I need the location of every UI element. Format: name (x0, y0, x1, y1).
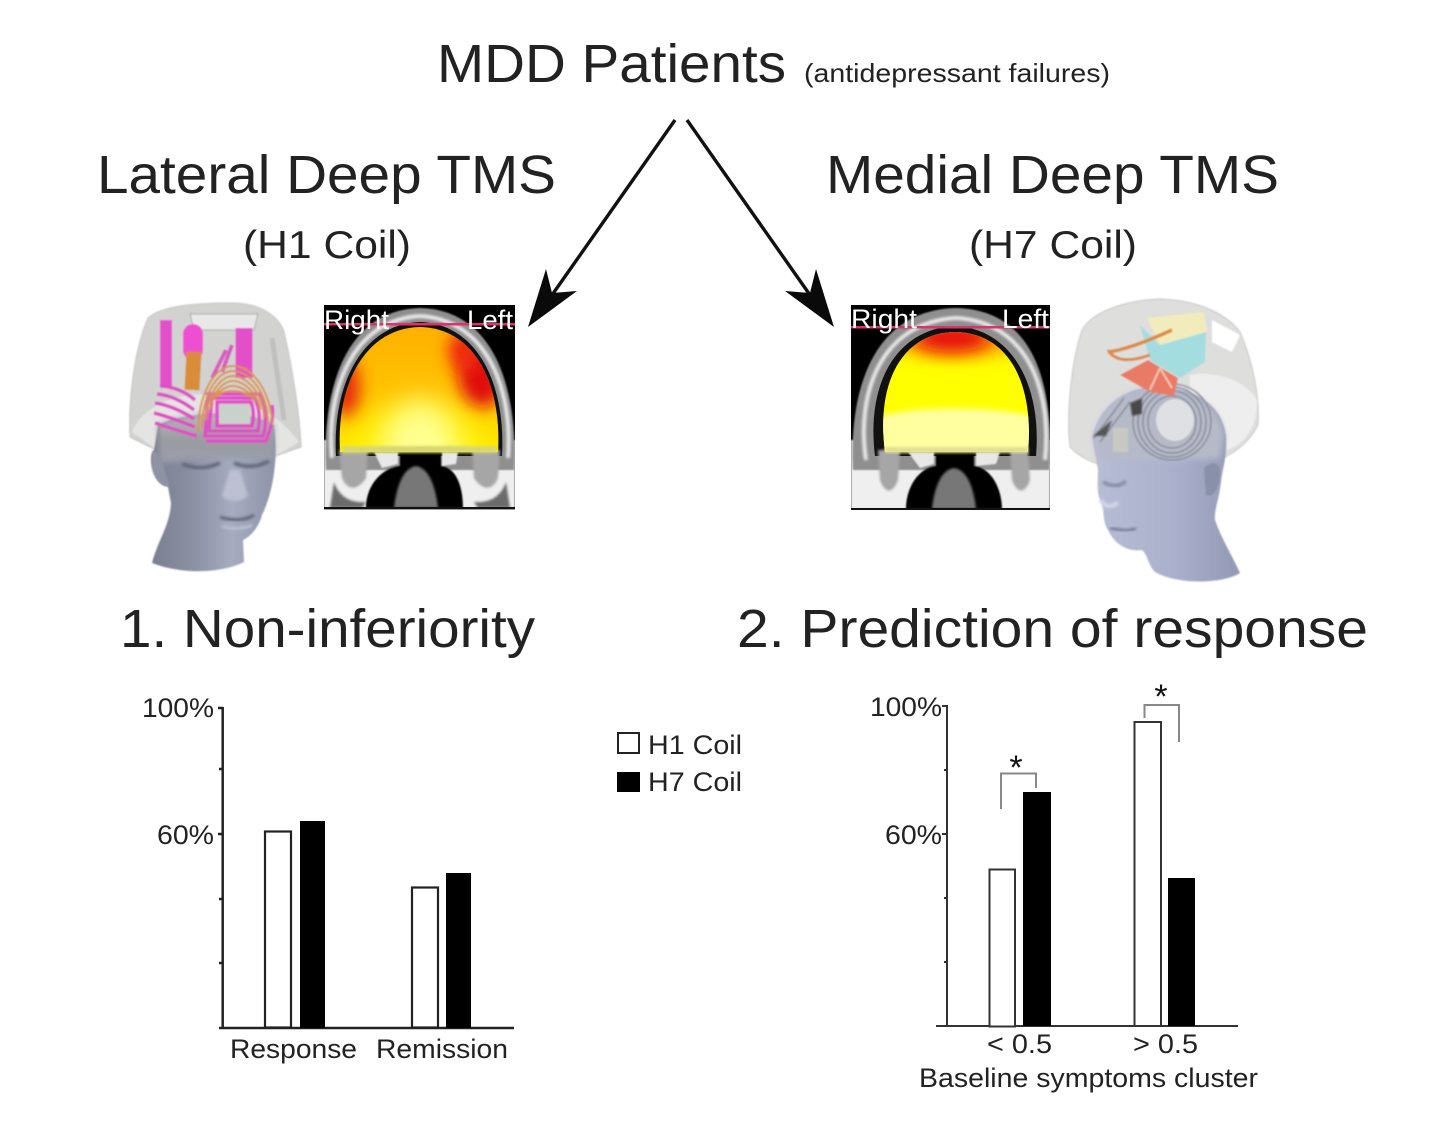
orange and pink coil (154, 320, 273, 441)
significance bracket: low (1001, 749, 1036, 809)
heading: non-inferiority: 1. Non-inferiority (120, 599, 535, 659)
y axis labels: 60% (157, 820, 214, 850)
bars: response (265, 821, 325, 1028)
legend: H1 Coil (648, 730, 742, 760)
coil windings (1156, 399, 1194, 441)
x axis labels: Remission (376, 1034, 508, 1064)
x axis labels (919, 1029, 1258, 1093)
heading: medial Deep TMS (826, 145, 1279, 267)
x axis labels: Baseline symptoms cluster (919, 1063, 1258, 1093)
label: Right / Left: Right (324, 305, 390, 335)
illustration: head with H1 coil (130, 303, 301, 571)
arrow: to medial Deep TMS (687, 120, 834, 327)
mechanical parts (1147, 312, 1207, 345)
heading: lateral Deep TMS: Lateral Deep TMS (97, 145, 556, 205)
bone and sinus (339, 450, 368, 488)
label: Right / Left (324, 305, 515, 335)
label: Right / Left: Right (851, 304, 918, 334)
illustration: head with H7 coil (1069, 299, 1258, 582)
label: Right / Left: Left (467, 305, 513, 335)
y axis labels (870, 692, 942, 850)
arrow: to lateral Deep TMS (528, 120, 675, 327)
heading: medial Deep TMS: Medial Deep TMS (826, 145, 1279, 205)
y axis labels: 100% (142, 693, 214, 723)
bars: remission (412, 873, 471, 1028)
y axis labels: 100% (870, 692, 942, 722)
bone and sinus (878, 450, 900, 491)
x axis labels: > 0.5 (1133, 1029, 1198, 1059)
bar chart: non-inferiority (142, 693, 514, 1064)
legend: H7 Coil (648, 767, 742, 797)
significance bracket: low: * (1009, 749, 1023, 787)
heat map (883, 332, 1029, 452)
brain scan: lateral field map (324, 305, 515, 510)
heading: lateral Deep TMS (97, 145, 556, 267)
title (437, 34, 1110, 94)
significance bracket: high (1144, 678, 1179, 742)
y axis labels (142, 693, 214, 850)
legend (617, 730, 742, 797)
heading: medial Deep TMS: (H7 Coil) (969, 224, 1137, 267)
significance bracket: high: * (1154, 678, 1168, 716)
heat map (340, 327, 498, 452)
brain scan: medial field map (851, 286, 1050, 510)
x axis labels: < 0.5 (987, 1029, 1052, 1059)
head (151, 414, 276, 571)
bars: above 0.5 (1134, 722, 1195, 1026)
y axis labels: 60% (885, 820, 942, 850)
title: (antidepressant failures) (804, 58, 1110, 88)
bar chart: prediction of response (870, 678, 1258, 1093)
bars: below 0.5 (990, 792, 1051, 1026)
head (1092, 387, 1240, 582)
heading: lateral Deep TMS: (H1 Coil) (243, 224, 411, 267)
x axis labels (230, 1034, 508, 1064)
x axis labels: Response (230, 1034, 357, 1064)
heading: prediction of response: 2. Prediction of response (737, 599, 1368, 659)
title: MDD Patients (437, 34, 786, 94)
label: Right / Left: Left (1002, 304, 1050, 334)
label: Right / Left (851, 304, 1050, 334)
